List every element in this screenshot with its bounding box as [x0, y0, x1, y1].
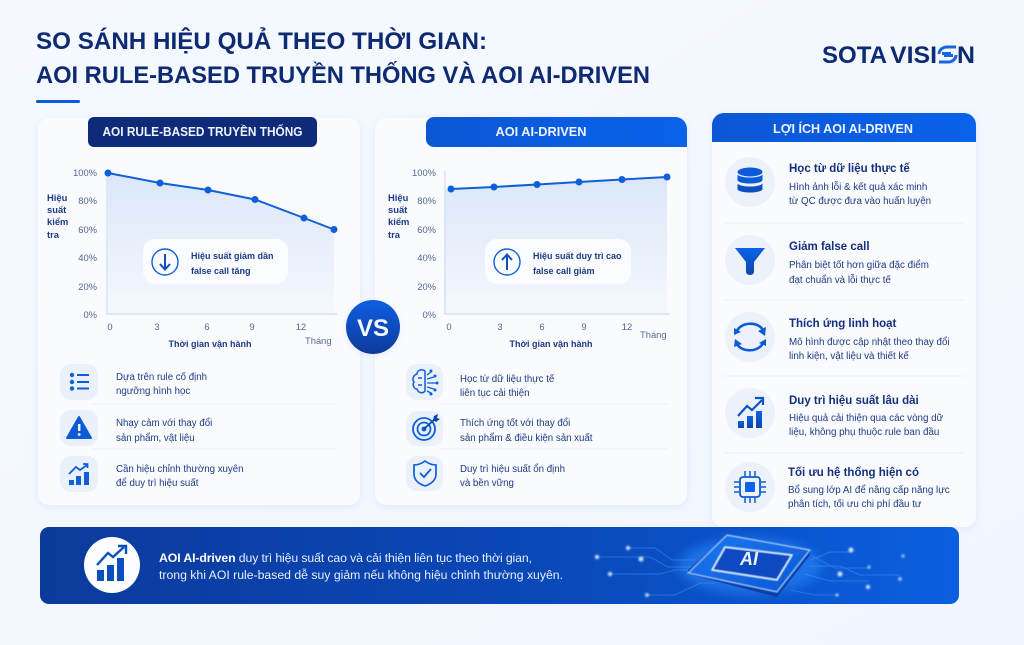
line chart: AI-driven performance: Hiệu — [388, 192, 409, 203]
line chart: rule-based performance: 9 — [249, 321, 255, 332]
bullet: sensitive to change: Nhạy cảm với thay đổi — [116, 418, 212, 429]
line chart: rule-based performance: Hiệu — [47, 192, 68, 203]
bullet: needs recalibration: Cần hiệu chỉnh thường xuyên — [116, 464, 244, 475]
callout: performance stays high — [485, 239, 631, 284]
logo: Sota Vision: VISI — [890, 42, 937, 69]
line chart: AI-driven performance: 0 — [446, 321, 452, 332]
benefit: flexible adaptation — [725, 312, 950, 362]
line chart: rule-based performance: 0 — [107, 321, 113, 332]
callout: performance stays high: Hiệu suất duy trì cao — [533, 251, 622, 261]
heading: AOI AI-driven — [426, 117, 687, 147]
line chart: rule-based performance: 60% — [78, 224, 97, 235]
benefit: optimise existing system — [725, 462, 950, 512]
bullet: adapts well: Thích ứng tốt với thay đổi — [460, 418, 570, 429]
line chart: AI-driven performance: 12 — [622, 321, 632, 332]
heading: benefits — [712, 113, 976, 142]
benefit: reduce false call: Giảm false call — [789, 241, 870, 253]
line chart: AI-driven performance: 100% — [412, 167, 436, 178]
line chart: rule-based performance: 12 — [296, 321, 306, 332]
callout: performance decreases: false call tăng — [191, 266, 251, 276]
line chart: AI-driven performance — [388, 167, 670, 349]
panel: benefits of AOI AI-driven — [712, 113, 976, 527]
bullet: stable performance: Duy trì hiệu suất ổn định — [460, 464, 565, 475]
bullet: adapts well — [406, 411, 593, 446]
banner: conclusion — [40, 527, 959, 604]
VS badge — [346, 300, 400, 354]
icon: growth chart — [84, 537, 140, 593]
benefit: long-term performance: Hiệu quả cải thiện qua các vòng dữ — [789, 413, 944, 424]
line chart: AI-driven performance: 9 — [581, 321, 587, 332]
conclusion text: AOI AI-driven duy trì hiệu suất cao và cải thiện liên tục theo thời gian, — [159, 551, 532, 565]
bullet: needs recalibration: để duy trì hiệu suất — [116, 478, 199, 489]
bullet: fixed rules: Dựa trên rule cố định — [116, 372, 207, 383]
bullet: stable performance — [406, 456, 565, 491]
bullet: learns from data: Học từ dữ liệu thực tế — [460, 374, 555, 385]
benefit: long-term performance: liệu, không phụ thuộc rule ban đầu — [789, 427, 939, 438]
line chart: AI-driven performance: suất — [388, 204, 407, 215]
benefit: reduce false call: Phân biệt tốt hơn giữa đặc điểm — [789, 260, 929, 271]
line chart: AI-driven performance: 6 — [539, 321, 545, 332]
illustration: AI chip with circuit lines — [595, 535, 904, 597]
line chart: rule-based performance: 80% — [78, 195, 97, 206]
benefit: optimise existing system: Bổ sung lớp AI để nâng cấp năng lực — [788, 485, 950, 496]
logo: Sota Vision: N — [957, 42, 975, 69]
logo: Sota Vision — [822, 42, 975, 69]
benefit: long-term performance — [725, 388, 944, 438]
benefit: flexible adaptation: Thích ứng linh hoạt — [789, 318, 897, 330]
callout: performance stays high: false call giảm — [533, 266, 595, 276]
bullet: stable performance: và bền vững — [460, 478, 514, 489]
line chart: AI-driven performance: 40% — [417, 252, 436, 263]
panel: AOI AI-driven — [375, 117, 687, 505]
VS badge: VS — [357, 315, 389, 342]
line chart: rule-based performance: Thời gian vận hành — [169, 339, 251, 349]
benefit: flexible adaptation: linh kiện, vật liệu và thiết kế — [789, 351, 909, 362]
bullet: adapts well: sản phẩm & điều kiện sản xuất — [460, 433, 593, 444]
line chart: AI-driven performance: 60% — [417, 224, 436, 235]
callout: performance decreases — [143, 239, 288, 284]
heading: AOI rule-based: AOI RULE-BASED TRUYỀN THỐNG — [102, 124, 302, 139]
conclusion text: trong khi AOI rule-based dễ suy giảm nếu không hiệu chỉnh thường xuyên. — [159, 567, 563, 582]
line chart: rule-based performance: 20% — [78, 281, 97, 292]
bullet: sensitive to change: sản phẩm, vật liệu — [116, 433, 195, 444]
bullet: sensitive to change — [60, 410, 212, 446]
line chart: rule-based performance: 40% — [78, 252, 97, 263]
line chart: AI-driven performance: 3 — [497, 321, 503, 332]
title: AOI RULE-BASED TRUYỀN THỐNG VÀ AOI AI-DRIVEN — [36, 61, 650, 89]
callout: performance decreases: Hiệu suất giảm dần — [191, 251, 274, 261]
line chart: AI-driven performance: 20% — [417, 281, 436, 292]
benefit: learn from real data: Học từ dữ liệu thực tế — [789, 163, 910, 175]
benefit: optimise existing system: Tối ưu hệ thống hiện có — [788, 467, 919, 479]
title — [36, 26, 650, 103]
title: SO SÁNH HIỆU QUẢ THEO THỜI GIAN: — [36, 26, 487, 55]
illustration: AI chip with circuit lines: AI — [739, 549, 759, 569]
line chart: AI-driven performance: tra — [388, 229, 401, 240]
benefit: learn from real data — [725, 157, 931, 207]
heading: AOI AI-driven: AOI AI-DRIVEN — [496, 125, 586, 139]
line chart: rule-based performance: Tháng — [305, 335, 332, 346]
panel: AOI rule-based — [38, 117, 360, 505]
line chart: AI-driven performance: kiểm — [388, 216, 409, 227]
benefit: learn from real data: từ QC được đưa vào huấn luyện — [789, 196, 931, 207]
heading: benefits: LỢI ÍCH AOI AI-DRIVEN — [773, 121, 913, 136]
bullet: learns from data — [406, 364, 555, 400]
logo: Sota Vision: SOTA — [822, 42, 887, 69]
line chart: AI-driven performance: 80% — [417, 195, 436, 206]
bullet: fixed rules: ngưỡng hình học — [116, 386, 190, 397]
line chart: rule-based performance: suất — [47, 204, 66, 215]
benefit: learn from real data: Hình ảnh lỗi & kết quả xác minh — [789, 182, 927, 193]
benefit: optimise existing system: phân tích, tối ưu chi phí đầu tư — [788, 499, 922, 510]
line chart: AI-driven performance: 0% — [422, 309, 436, 320]
line chart: AI-driven performance: Thời gian vận hành — [510, 339, 592, 349]
conclusion text — [159, 551, 563, 582]
line chart: AI-driven performance: Tháng — [640, 329, 667, 340]
bullet: needs recalibration — [60, 456, 244, 492]
line chart: rule-based performance: tra — [47, 229, 60, 240]
line chart: rule-based performance: kiểm — [47, 216, 68, 227]
bullet: learns from data: liên tục cải thiện — [460, 388, 529, 399]
line chart: rule-based performance: 0% — [83, 309, 97, 320]
benefit: reduce false call: đạt chuẩn và lỗi thực tế — [789, 275, 891, 286]
bullet: fixed rules — [60, 364, 207, 400]
line chart: rule-based performance: 100% — [73, 167, 97, 178]
benefit: long-term performance: Duy trì hiệu suất lâu dài — [789, 395, 919, 407]
benefit: flexible adaptation: Mô hình được cập nhật theo thay đổi — [789, 337, 950, 348]
heading: AOI rule-based — [88, 117, 317, 147]
line chart: rule-based performance — [47, 167, 338, 349]
line chart: rule-based performance: 6 — [204, 321, 210, 332]
line chart: rule-based performance: 3 — [154, 321, 160, 332]
benefit: reduce false call — [725, 235, 929, 286]
